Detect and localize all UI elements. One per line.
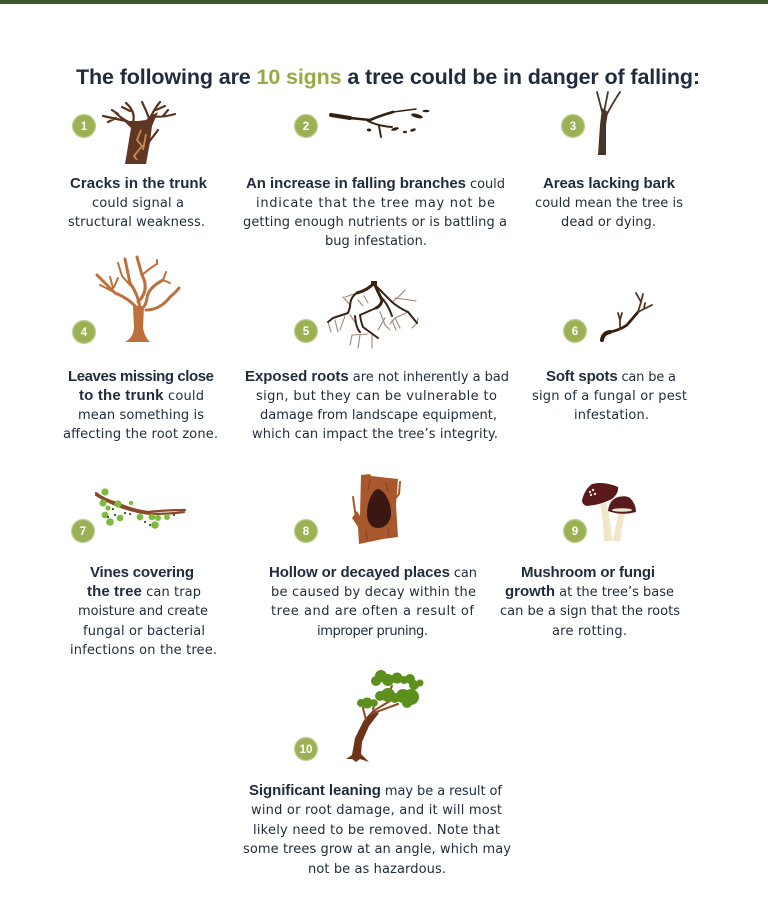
icon: twig bbox=[602, 293, 652, 340]
text: sign 2 bbox=[243, 175, 507, 249]
panel: sign 9 mushrooms bbox=[500, 483, 680, 639]
text: sign 5: damage from landscape equipment, bbox=[260, 408, 497, 423]
badge 8 bbox=[294, 520, 318, 542]
text: sign 2: getting enough nutrients or is battling a bbox=[243, 215, 507, 230]
text: sign 6: infestation. bbox=[574, 408, 649, 423]
text: sign 9: Mushroom or fungi bbox=[521, 564, 655, 581]
text: sign 5 bbox=[245, 368, 509, 442]
text: sign 3: could mean the tree is bbox=[535, 196, 683, 211]
text: sign 9: are rotting. bbox=[552, 624, 627, 639]
text: sign 6: Soft spots can be a bbox=[546, 368, 676, 385]
text: sign 6 bbox=[532, 368, 687, 423]
text: sign 6: sign of a fungal or pest bbox=[532, 389, 687, 404]
text: sign 2: An increase in falling branches could bbox=[246, 175, 505, 192]
text: sign 7: moisture and create bbox=[78, 604, 208, 619]
text: sign 5: which can impact the tree’s integrity. bbox=[252, 427, 498, 442]
text: sign 7: Vines covering bbox=[90, 564, 194, 581]
badge 7: 7 bbox=[80, 526, 86, 538]
text: sign 9: growth at the tree’s base bbox=[505, 583, 674, 600]
badge 5: 5 bbox=[303, 326, 310, 338]
text: sign 9: can be a sign that the roots bbox=[500, 604, 680, 619]
text: sign 10: Significant leaning may be a result of bbox=[249, 782, 502, 799]
icon: mushrooms bbox=[582, 483, 636, 541]
icon: hollow trunk bbox=[352, 474, 400, 544]
text: sign 4: Leaves missing close bbox=[68, 368, 214, 385]
text: sign 3 bbox=[535, 175, 683, 230]
text: sign 2: bug infestation. bbox=[325, 234, 427, 249]
badge 9 bbox=[564, 520, 586, 542]
badge 2 bbox=[294, 114, 318, 138]
top bar bbox=[0, 0, 768, 4]
badge 4 bbox=[72, 320, 96, 344]
badge 10: 10 bbox=[300, 744, 312, 756]
badge 3: 3 bbox=[570, 121, 576, 133]
text: sign 1 bbox=[68, 175, 208, 230]
panel: sign 3 lacking bark bbox=[535, 92, 683, 230]
text: sign 2: indicate that the tree may not be bbox=[256, 196, 495, 211]
badge 3 bbox=[562, 114, 584, 138]
panel: sign 7 vines bbox=[70, 488, 217, 658]
text: sign 7 bbox=[70, 564, 217, 658]
badge 7 bbox=[72, 520, 94, 542]
badge 6 bbox=[564, 320, 586, 342]
text: sign 5: Exposed roots are not inherently a bad bbox=[245, 368, 509, 385]
text: sign 1: Cracks in the trunk bbox=[70, 175, 208, 192]
icon: cracked trunk bbox=[103, 102, 175, 164]
badge 1: 1 bbox=[81, 121, 88, 133]
text: sign 4: mean something is bbox=[78, 408, 204, 423]
badge 6: 6 bbox=[572, 326, 578, 338]
panel: sign 10 leaning bbox=[243, 670, 511, 877]
text: sign 8: be caused by decay within the bbox=[271, 585, 476, 600]
panel: sign 8 hollow bbox=[269, 474, 477, 639]
text: sign 1: could signal a bbox=[92, 196, 184, 211]
text: sign 10 bbox=[243, 782, 511, 877]
text: sign 3: dead or dying. bbox=[561, 215, 656, 230]
title: The following are 10 signs a tree could be in danger of falling: bbox=[76, 65, 700, 89]
text: sign 1: structural weakness. bbox=[68, 215, 205, 230]
text: sign 3: Areas lacking bark bbox=[543, 175, 676, 192]
icon: roots bbox=[328, 281, 418, 348]
icon: bare trunk bbox=[597, 92, 620, 155]
text: sign 9 bbox=[500, 564, 680, 639]
panel: sign 6 soft spots bbox=[532, 293, 687, 423]
badge 10 bbox=[294, 738, 318, 760]
icon: bare tree bbox=[97, 257, 179, 342]
panel: sign 2 falling branches bbox=[243, 109, 507, 249]
text: sign 8: improper pruning. bbox=[317, 624, 428, 639]
text: sign 4: to the trunk could bbox=[79, 387, 204, 404]
text: sign 8 bbox=[269, 564, 477, 639]
text: sign 7: fungal or bacterial bbox=[83, 624, 205, 639]
panel: sign 4 leaves missing bbox=[63, 257, 218, 442]
icon: leaning tree bbox=[346, 670, 424, 762]
panel: sign 1 cracks in the trunk bbox=[68, 102, 208, 230]
text: sign 10: not be as hazardous. bbox=[308, 862, 446, 877]
text: sign 7: infections on the tree. bbox=[70, 643, 217, 658]
text: sign 8: tree and are often a result of bbox=[271, 604, 474, 619]
text: sign 10: likely need to be removed. Note that bbox=[253, 823, 500, 838]
text: sign 10: some trees grow at an angle, which may bbox=[243, 842, 511, 857]
text: sign 10: wind or root damage, and it will most bbox=[251, 803, 502, 818]
icon: vine-covered branch bbox=[96, 488, 185, 529]
text: sign 7: the tree can trap bbox=[87, 583, 201, 600]
text: sign 5: sign, but they can be vulnerable to bbox=[256, 389, 497, 404]
badge 4: 4 bbox=[81, 327, 88, 339]
badge 5 bbox=[294, 320, 318, 342]
badge 8: 8 bbox=[303, 526, 310, 538]
icon: branch with falling pieces bbox=[331, 109, 430, 137]
text: sign 4 bbox=[63, 368, 218, 442]
badge 9: 9 bbox=[572, 526, 578, 538]
text: sign 4: affecting the root zone. bbox=[63, 427, 218, 442]
text: sign 8: Hollow or decayed places can bbox=[269, 564, 477, 581]
badge 2: 2 bbox=[303, 121, 309, 133]
panel: sign 5 exposed roots bbox=[245, 281, 509, 442]
